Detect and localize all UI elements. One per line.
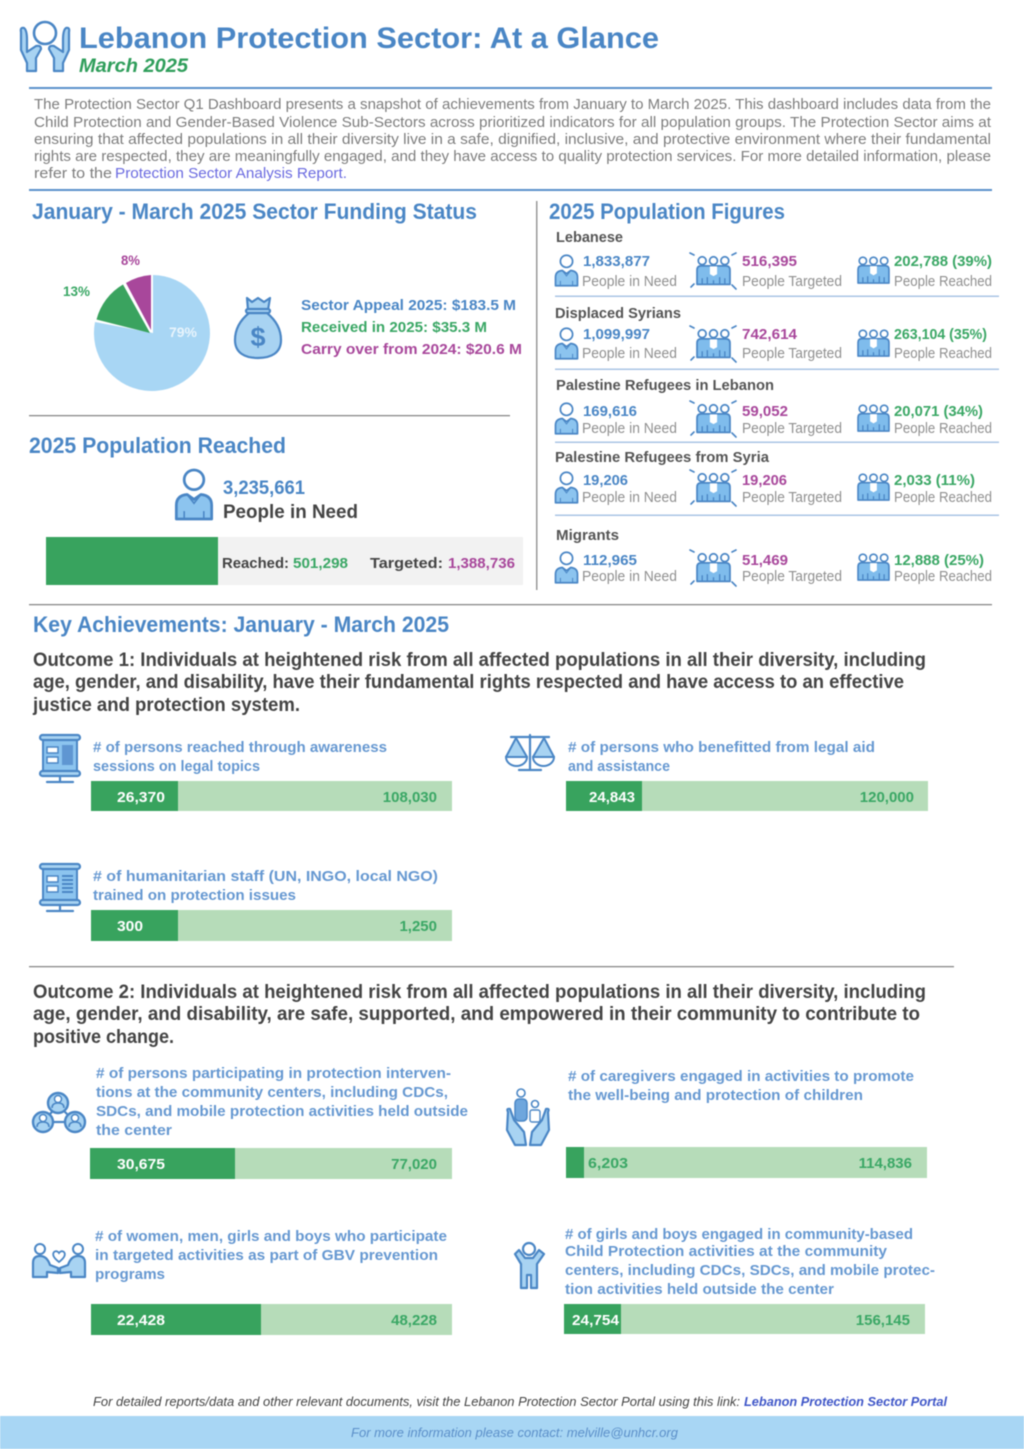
- group: Displaced Syrians: 263,104 (35%): [894, 326, 987, 343]
- icon: two people and heart: [33, 1244, 85, 1277]
- indicator: humanitarian staff: [40, 864, 452, 941]
- footer note: Lebanon Protection Sector Portal: [744, 1395, 948, 1409]
- indicator: protection interventions: # of persons participating in protection interven-: [96, 1065, 451, 1082]
- progress bar: reached vs targeted: Reached:: [222, 555, 289, 572]
- indicator: caregivers: # of caregivers engaged in activities to promote: [568, 1068, 914, 1085]
- subtitle: date: March 2025: [79, 56, 188, 77]
- intro paragraph: refer to the: [34, 165, 112, 182]
- group: Lebanese: 516,395: [742, 253, 797, 270]
- indicator: girls and boys: [515, 1226, 935, 1334]
- intro paragraph: The Protection Sector Q1 Dashboard presents a snapshot of achievements from January to March 2025. This dashboard includes data from the: [34, 96, 991, 113]
- progress bar: 48,228: [391, 1312, 437, 1329]
- indicator: protection interventions: SDCs, and mobile protection activities held outside: [96, 1103, 468, 1120]
- footer band: contact: For more information please contact: melville@unhcr.org: [351, 1425, 679, 1440]
- outcome 2 statement: Outcome 2: Individuals at heightened risk from all affected populations in all their diversity, including: [33, 982, 926, 1003]
- progress bar: 30,675: [117, 1156, 165, 1173]
- progress bar: 300: [117, 918, 143, 935]
- group: Migrants: 12,888 (25%): [894, 552, 984, 569]
- heading: population reached: 2025 Population Reached: [29, 433, 286, 458]
- indicator: legal aid: # of persons who benefitted from legal aid: [568, 739, 875, 756]
- group: Palestine Refugees in Lebanon: People Reached: [894, 421, 992, 437]
- group: Displaced Syrians: People Targeted: [742, 346, 842, 362]
- funding legend: Carry over from 2024: $20.6 M: [301, 341, 522, 358]
- progress bar: reached vs targeted: Targeted:: [370, 555, 443, 572]
- group: Displaced Syrians: 1,099,997: [583, 326, 650, 343]
- people in need total: People in Need: [223, 502, 358, 523]
- group: Lebanese: Lebanese: [556, 230, 623, 246]
- progress bar: 108,030: [383, 789, 437, 806]
- group: Palestine Refugees in Lebanon: 20,071 (34%): [894, 403, 983, 420]
- group: Migrants: People in Need: [582, 569, 677, 585]
- indicator: legal aid: and assistance: [568, 758, 670, 775]
- outcome 2 statement: [33, 982, 926, 1048]
- icon: person: [176, 470, 212, 519]
- progress bar: 26,370: [117, 789, 165, 806]
- indicator: awareness sessions: # of persons reached through awareness: [93, 739, 387, 756]
- icon: money bag: [235, 298, 281, 358]
- group: Displaced Syrians: People in Need: [582, 346, 677, 362]
- outcome 1 statement: justice and protection system.: [32, 695, 300, 716]
- icon: money bag: $: [250, 322, 266, 352]
- indicator: girls and boys: Child Protection activities at the community: [565, 1243, 888, 1260]
- group: Lebanese: 1,833,877: [583, 253, 650, 270]
- progress bar: [564, 1304, 925, 1334]
- indicator: awareness sessions: [40, 735, 452, 811]
- group: Displaced Syrians: [555, 306, 992, 362]
- group: Palestine Refugees from Syria: 2,033 (11%): [894, 472, 975, 489]
- group: Lebanese: 202,788 (39%): [894, 253, 992, 270]
- intro paragraph: [34, 96, 992, 182]
- pie chart: funding shares: [63, 253, 210, 391]
- indicator: protection interventions: the center: [96, 1122, 172, 1139]
- progress bar: 24,754: [572, 1312, 620, 1329]
- intro paragraph: Child Protection and Gender-Based Violence Sub-Sectors across prioritized indicators for all population groups. The Protection Sector aims at: [34, 114, 992, 131]
- progress bar: reached vs targeted: 501,298: [293, 555, 348, 572]
- progress bar: 114,836: [859, 1155, 912, 1172]
- indicator: legal aid: [506, 735, 928, 811]
- progress bar: [566, 781, 928, 811]
- group: Migrants: 112,965: [583, 552, 637, 569]
- progress bar: 22,428: [117, 1312, 165, 1329]
- indicator: GBV prevention: programs: [95, 1266, 165, 1283]
- outcome 2 statement: age, gender, and disability, are safe, supported, and empowered in their community to contribute to: [33, 1004, 920, 1025]
- progress bar: [91, 1304, 452, 1335]
- icon: hands holding family: [507, 1089, 549, 1145]
- icon: training board: [40, 864, 80, 911]
- progress bar: [90, 1148, 452, 1179]
- indicator: awareness sessions: sessions on legal topics: [93, 758, 260, 775]
- intro paragraph: Protection Sector Analysis Report.: [115, 165, 347, 182]
- indicator: GBV prevention: [33, 1228, 452, 1335]
- indicator: humanitarian staff: trained on protection issues: [93, 887, 296, 904]
- group: Palestine Refugees from Syria: Palestine Refugees from Syria: [555, 450, 770, 466]
- group: Migrants: People Targeted: [742, 569, 842, 585]
- pie chart: funding shares: 79%: [169, 325, 197, 340]
- progress bar: 156,145: [856, 1312, 910, 1329]
- group: Palestine Refugees in Lebanon: 169,616: [583, 403, 637, 420]
- group: Palestine Refugees in Lebanon: [556, 378, 992, 437]
- indicator: GBV prevention: # of women, men, girls and boys who participate: [95, 1228, 447, 1245]
- group: Migrants: Migrants: [556, 528, 619, 544]
- footer band: contact: [0, 1416, 1024, 1449]
- people in need total: 3,235,661: [223, 478, 305, 499]
- group: Palestine Refugees from Syria: 19,206: [583, 472, 628, 489]
- progress bar: [91, 910, 452, 941]
- group: Migrants: People Reached: [894, 569, 992, 585]
- progress bar: [91, 781, 452, 811]
- group: Lebanese: [556, 230, 992, 290]
- group: Lebanese: People Reached: [894, 274, 992, 290]
- group: Displaced Syrians: Displaced Syrians: [555, 306, 681, 322]
- group: Lebanese: People Targeted: [742, 274, 842, 290]
- group: Displaced Syrians: 742,614: [742, 326, 798, 343]
- indicator: girls and boys: # of girls and boys engaged in community-based: [565, 1226, 913, 1243]
- indicator: girls and boys: tion activities held outside the center: [565, 1281, 834, 1298]
- panel: population figures: [549, 199, 999, 586]
- indicator: caregivers: [507, 1068, 927, 1178]
- outcome 2 statement: positive change.: [33, 1027, 174, 1048]
- group: Palestine Refugees from Syria: [555, 450, 992, 506]
- panel: population reached: [29, 433, 523, 585]
- group: Lebanese: People in Need: [582, 274, 677, 290]
- intro paragraph: ensuring that affected populations in all their diversity live in a safe, dignified, inclusive, and protective environment where their fundamental: [34, 131, 991, 148]
- indicator: protection interventions: tions at the community centers, including CDCs,: [96, 1084, 448, 1101]
- heading: funding: January - March 2025 Sector Funding Status: [32, 199, 477, 224]
- people in need total: [223, 478, 358, 523]
- group: Palestine Refugees from Syria: 19,206: [742, 472, 787, 489]
- icon: information board: [40, 735, 80, 782]
- group: Palestine Refugees in Lebanon: People Targeted: [742, 421, 842, 437]
- group: Palestine Refugees from Syria: People Reached: [894, 490, 992, 506]
- pie chart: funding shares: 13%: [63, 284, 90, 299]
- group: Palestine Refugees in Lebanon: People in Need: [582, 421, 677, 437]
- indicator: girls and boys: centers, including CDCs, SDCs, and mobile protec-: [565, 1262, 935, 1279]
- outcome 1 statement: [32, 650, 926, 716]
- indicator: caregivers: the well-being and protection of children: [568, 1087, 863, 1104]
- group: Palestine Refugees from Syria: People Targeted: [742, 490, 842, 506]
- indicator: humanitarian staff: # of humanitarian staff (UN, INGO, local NGO): [93, 868, 438, 885]
- indicator: GBV prevention: in targeted activities as part of GBV prevention: [95, 1247, 438, 1264]
- icon: community network: [33, 1093, 85, 1132]
- group: Migrants: [556, 528, 992, 586]
- title: Lebanon Protection Sector: At a Glance: [79, 22, 659, 55]
- progress bar: 24,843: [589, 789, 635, 806]
- group: Palestine Refugees from Syria: People in Need: [582, 490, 677, 506]
- funding legend: Received in 2025: $35.3 M: [301, 319, 487, 336]
- progress bar: 77,020: [391, 1156, 437, 1173]
- progress bar: reached vs targeted: [46, 537, 523, 585]
- pie chart: funding shares: 8%: [121, 253, 140, 268]
- panel: funding status: [32, 199, 522, 391]
- footer note: For detailed reports/data and other relevant documents, visit the Lebanon Protection Sector Portal using this link:: [93, 1395, 740, 1409]
- group: Palestine Refugees in Lebanon: 59,052: [742, 403, 788, 420]
- progress bar: 120,000: [860, 789, 914, 806]
- header icon: hands protecting a person: [21, 22, 69, 71]
- heading: population figures: 2025 Population Figures: [549, 199, 785, 224]
- outcome 1 statement: Outcome 1: Individuals at heightened risk from all affected populations in all their diversity, including: [33, 650, 926, 671]
- progress bar: [566, 1147, 927, 1178]
- group: Migrants: 51,469: [742, 552, 788, 569]
- heading: key achievements: Key Achievements: January - March 2025: [33, 612, 449, 637]
- indicator: protection interventions: [33, 1065, 468, 1179]
- intro paragraph: rights are respected, they are meaningfully engaged, and they have access to quality protection services. For more detailed information, please: [34, 148, 991, 165]
- group: Displaced Syrians: People Reached: [894, 346, 992, 362]
- icon: scales: [506, 735, 554, 770]
- group: Palestine Refugees in Lebanon: Palestine Refugees in Lebanon: [556, 378, 774, 394]
- funding legend: Sector Appeal 2025: $183.5 M: [301, 297, 516, 314]
- funding legend: [301, 297, 522, 358]
- progress bar: 1,250: [399, 918, 437, 935]
- progress bar: reached vs targeted: 1,388,736: [448, 555, 515, 572]
- progress bar: 6,203: [588, 1155, 628, 1172]
- outcome 1 statement: age, gender, and disability, have their fundamental rights respected and have access to an effective: [33, 672, 904, 693]
- icon: child with raised arms: [515, 1243, 544, 1288]
